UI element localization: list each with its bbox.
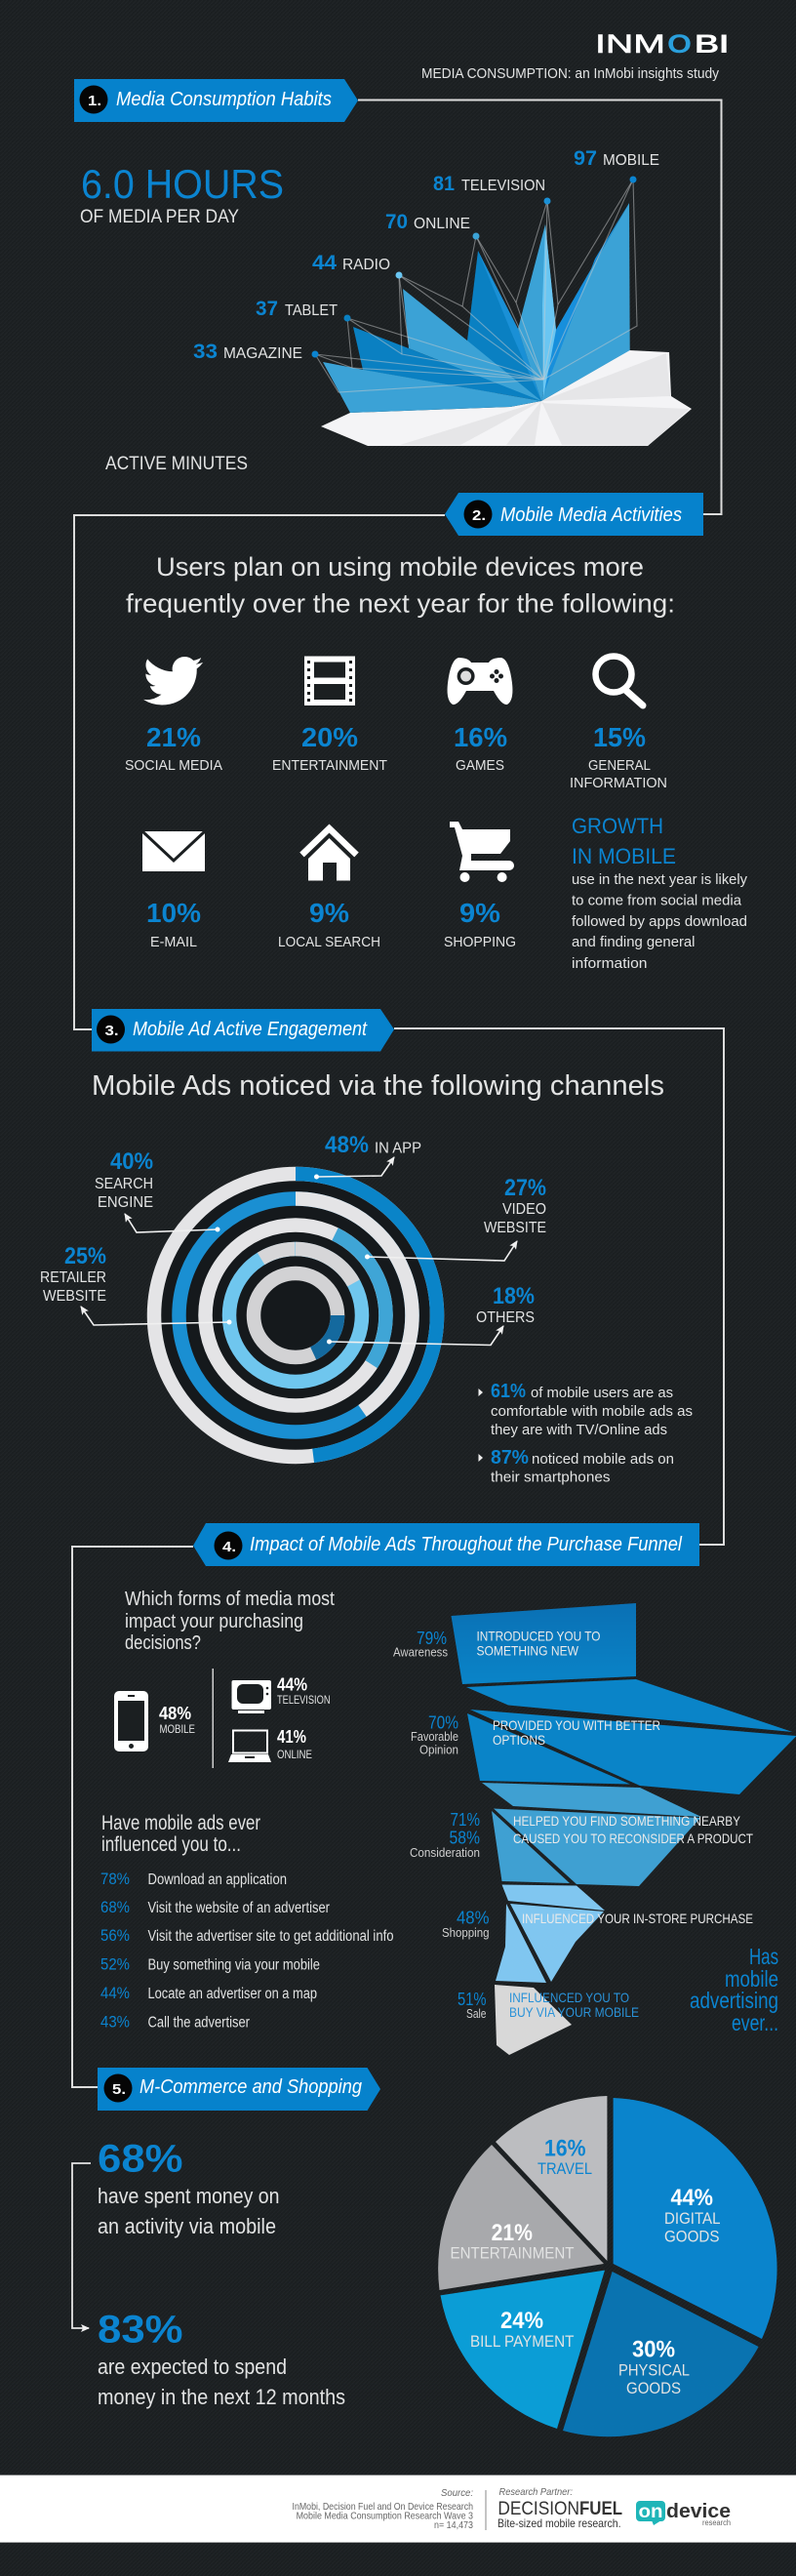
label: 79% awareness <box>393 1629 448 1659</box>
logo: InMobi: INM <box>595 29 665 59</box>
research partner: DecisionFuel: Research Partner: <box>499 2486 573 2498</box>
research partner: DecisionFuel: DECISION <box>498 2499 579 2519</box>
callout: retailer website: 25% <box>64 1243 106 1269</box>
heading: users plan: Users plan on using mobile devices more <box>156 552 644 582</box>
label: 81 television <box>433 173 545 195</box>
banner 2: Mobile Media Activities <box>445 493 703 536</box>
label: 70 online <box>385 211 470 233</box>
funnel: sale <box>495 1985 639 2055</box>
label: 44 radio: RADIO <box>342 257 390 273</box>
label: 71% 58% consideration: 71% <box>451 1810 480 1830</box>
label: 97 mobile: MOBILE <box>603 152 659 169</box>
stat: online 41%: ONLINE <box>277 1750 312 1761</box>
ring: in app <box>154 1174 437 1457</box>
stat: local search: 9% <box>309 898 349 928</box>
research partner: DecisionFuel <box>498 2486 622 2530</box>
bullet: 87% noticed: their smartphones <box>491 1469 611 1485</box>
callout: has mobile advertising ever: mobile <box>725 1966 778 1992</box>
slice: travel: TRAVEL <box>537 2159 592 2178</box>
slice: digital goods: GOODS <box>664 2228 720 2246</box>
stat: entertainment: ENTERTAINMENT <box>272 757 387 774</box>
stat: local search: LOCAL SEARCH <box>278 934 380 950</box>
connector lines between sections <box>72 100 724 2087</box>
pie chart: spending categories <box>438 2096 777 2436</box>
heading: have mobile ads ever <box>101 1812 260 1856</box>
slice: bill payment: BILL PAYMENT <box>470 2332 574 2351</box>
source text: Mobile Media Consumption Research Wave 3 <box>297 2510 473 2521</box>
stat: general information: GENERAL <box>588 757 651 774</box>
label: 33 magazine: 33 <box>193 341 218 363</box>
stat: shopping: 9% <box>459 898 500 928</box>
stat: games <box>454 722 507 774</box>
list: influence actions: 43% <box>100 2012 130 2032</box>
banner 5: M-Commerce and Shopping <box>98 2068 380 2111</box>
logo: InMobi <box>595 29 729 59</box>
fan: television <box>518 224 556 401</box>
study subtitle: MEDIA CONSUMPTION: an InMobi insights study <box>421 65 719 82</box>
stat: online 41%: 41% <box>277 1727 306 1747</box>
stat: 83% expected: 83% <box>98 2309 183 2352</box>
slice: physical goods: PHYSICAL <box>618 2361 690 2380</box>
slice: bill payment: 24% <box>500 2308 543 2334</box>
funnel: consideration: CAUSED YOU TO RECONSIDER A PRODUCT <box>513 1831 753 1846</box>
question: which forms of media: Which forms of media most <box>125 1589 335 1610</box>
stat: social media: SOCIAL MEDIA <box>125 757 222 774</box>
label: 70% favorable opinion <box>411 1713 458 1756</box>
caption: active minutes: ACTIVE MINUTES <box>105 453 248 474</box>
stat: general information: INFORMATION <box>570 775 667 791</box>
ring chart: ad channels <box>147 1167 444 1464</box>
slice: entertainment <box>438 2145 604 2290</box>
banner 3: Mobile Ad Active Engagement: Mobile Ad Active Engagement <box>133 1019 368 1040</box>
stat: general information: 15% <box>593 722 646 752</box>
label: 70% favorable opinion: 70% <box>428 1713 458 1733</box>
label: 70 online: 70 <box>385 211 408 233</box>
stat: e-mail <box>146 898 201 950</box>
callout: search engine: ENGINE <box>98 1194 153 1211</box>
fan: online <box>439 251 541 401</box>
stat: 6.0 hours: 6.0 HOURS <box>81 161 284 207</box>
callout: has mobile advertising ever: ever... <box>732 2010 778 2035</box>
icon: shopping cart <box>450 822 514 882</box>
bullet: 87% noticed: noticed mobile ads on <box>532 1451 674 1468</box>
callout: retailer website <box>40 1243 232 1325</box>
callout: growth in mobile: information <box>572 956 648 972</box>
slice: entertainment: ENTERTAINMENT <box>451 2244 574 2262</box>
stat: games: 16% <box>454 722 507 752</box>
bullet: 61% comfortable: they are with TV/Online ads <box>491 1422 667 1438</box>
list: influence actions <box>100 1870 394 2032</box>
question: which forms of media: impact your purchasing <box>125 1611 303 1632</box>
stat: television 44% <box>277 1674 330 1707</box>
icon: twitter bird <box>143 657 203 705</box>
label: 37 tablet: 37 <box>256 298 278 320</box>
stat: mobile 48% <box>159 1704 195 1736</box>
chart dots <box>312 176 636 357</box>
logo: on device research: research <box>702 2518 731 2527</box>
label: 97 mobile <box>574 147 659 170</box>
banner 5: M-Commerce and Shopping: M-Commerce and Shopping <box>139 2076 362 2098</box>
bullet: 61% comfortable <box>478 1381 693 1438</box>
stat: 6.0 hours <box>80 161 284 227</box>
footer band <box>0 2475 796 2543</box>
list: influence actions: Locate an advertiser on a map <box>148 1986 317 2002</box>
callout: search engine: 40% <box>110 1148 153 1175</box>
callout: growth in mobile <box>572 814 748 972</box>
banner 4: Impact of Mobile Ads: 4. <box>222 1539 236 1555</box>
stat: shopping: SHOPPING <box>444 934 516 950</box>
bullet: 87% noticed <box>478 1447 674 1485</box>
label: 70% favorable opinion: Favorable <box>411 1729 458 1744</box>
heading: mobile ads noticed: Mobile Ads noticed via the following channels <box>92 1070 664 1102</box>
stat: 68% spent: 68% <box>98 2138 183 2181</box>
stat: e-mail: E-MAIL <box>150 934 197 950</box>
funnel: favorable opinion: PROVIDED YOU WITH BETTER <box>493 1717 660 1733</box>
stat: 83% expected: money in the next 12 months <box>98 2385 345 2409</box>
banner 4: Impact of Mobile Ads: Impact of Mobile Ads Throughout the Purchase Funnel <box>250 1534 683 1555</box>
stat: mobile 48%: MOBILE <box>160 1724 195 1736</box>
label: 79% awareness: Awareness <box>393 1645 448 1659</box>
list: influence actions: 78% <box>100 1870 130 1888</box>
label: 37 tablet <box>256 298 338 320</box>
logo: on device research <box>636 2501 731 2527</box>
heading: have mobile ads ever: influenced you to... <box>101 1833 241 1856</box>
callout: others <box>327 1283 535 1345</box>
fan: mobile <box>541 203 630 401</box>
stat: entertainment: 20% <box>301 722 358 752</box>
funnel: awareness: INTRODUCED YOU TO <box>476 1628 601 1643</box>
bullet: 87% noticed: 87% <box>491 1447 529 1469</box>
callout: video website <box>365 1175 546 1261</box>
logo: InMobi: O <box>667 29 692 59</box>
callout: search engine: SEARCH <box>95 1176 153 1192</box>
icon: television <box>232 1680 271 1713</box>
funnel: awareness <box>451 1603 792 1732</box>
fan: tablet <box>353 327 541 401</box>
banner 3: Mobile Ad Active Engagement: 3. <box>105 1023 119 1039</box>
funnel: favorable opinion: OPTIONS <box>493 1732 545 1748</box>
callout: video website: 27% <box>504 1175 546 1201</box>
callout: growth in mobile: followed by apps download <box>572 914 747 930</box>
stat: 68% spent: an activity via mobile <box>98 2214 276 2238</box>
funnel: awareness: SOMETHING NEW <box>476 1643 579 1659</box>
stat: television 44%: TELEVISION <box>277 1695 330 1707</box>
stat: e-mail: 10% <box>146 898 201 928</box>
funnel chart <box>393 1603 796 2055</box>
fan: radio <box>403 289 541 401</box>
callout: search engine <box>95 1148 220 1232</box>
stat: social media: 21% <box>146 722 201 752</box>
ring: others <box>254 1273 338 1357</box>
funnel: consideration <box>482 1783 753 1886</box>
label: 71% 58% consideration: 58% <box>449 1829 480 1848</box>
stat: 6.0 hours: OF MEDIA PER DAY <box>80 206 239 227</box>
stat: 83% expected <box>98 2309 345 2409</box>
banner 5: M-Commerce and Shopping: 5. <box>112 2081 126 2098</box>
stat: local search <box>278 898 380 950</box>
label: 48% shopping: 48% <box>457 1909 490 1928</box>
stat: mobile 48%: 48% <box>159 1704 191 1723</box>
stat: entertainment <box>272 722 387 774</box>
label: 51% sale <box>458 1990 486 2021</box>
list: influence actions: 44% <box>100 1984 130 2002</box>
label: 48% shopping <box>442 1909 490 1940</box>
bullet: 61% comfortable: comfortable with mobile ads as <box>491 1403 693 1420</box>
label: 79% awareness: 79% <box>417 1629 447 1648</box>
source text <box>293 2487 473 2531</box>
banner 1: Media Consumption Habits: 1. <box>88 93 101 109</box>
icon: phone <box>114 1691 148 1751</box>
slice: entertainment: 21% <box>492 2220 533 2246</box>
label: 33 magazine <box>193 341 302 363</box>
wire outlines <box>315 180 637 392</box>
heading: users plan: frequently over the next year for the following: <box>126 589 675 619</box>
label: 81 television: TELEVISION <box>461 178 545 194</box>
ring: search engine <box>179 1198 412 1432</box>
stat: social media <box>125 722 222 774</box>
banner 1: Media Consumption Habits <box>74 79 358 122</box>
label: 51% sale: Sale <box>466 2006 486 2021</box>
list: influence actions: 52% <box>100 1955 130 1973</box>
icon: envelope <box>142 831 205 871</box>
label: 71% 58% consideration: Consideration <box>410 1845 480 1860</box>
slice: digital goods <box>614 2098 777 2339</box>
label: 97 mobile: 97 <box>574 147 597 170</box>
callout: growth in mobile: GROWTH <box>572 814 663 838</box>
bullet: 61% comfortable: of mobile users are as <box>531 1385 673 1401</box>
research partner: DecisionFuel: Bite-sized mobile research. <box>498 2516 620 2530</box>
slice: travel <box>496 2096 607 2261</box>
list: influence actions: Visit the advertiser site to get additional info <box>148 1928 394 1945</box>
callout: growth in mobile: to come from social media <box>572 894 742 909</box>
callout: video website: WEBSITE <box>484 1220 546 1236</box>
icon: house <box>302 828 357 880</box>
heading: users plan <box>126 552 675 619</box>
slice: digital goods: DIGITAL <box>664 2209 720 2228</box>
banner 2: Mobile Media Activities: 2. <box>472 507 486 524</box>
stat: television 44%: 44% <box>277 1674 307 1694</box>
question: which forms of media <box>125 1589 335 1654</box>
callout: others: OTHERS <box>476 1309 535 1326</box>
slice: bill payment <box>441 2271 605 2429</box>
callout: growth in mobile: IN MOBILE <box>572 844 676 868</box>
banner 3: Mobile Ad Active Engagement <box>92 1009 394 1052</box>
icon: film strip <box>304 656 355 705</box>
callout: growth in mobile: use in the next year is likely <box>572 872 748 888</box>
label: 48% shopping: Shopping <box>442 1925 490 1940</box>
label: 33 magazine: MAGAZINE <box>223 345 302 362</box>
callout: has mobile advertising ever: Has <box>749 1944 778 1969</box>
list: influence actions: 56% <box>100 1926 130 1945</box>
logo: InMobi: BI <box>695 29 729 59</box>
stat: games: GAMES <box>456 757 504 774</box>
stat: 68% spent <box>98 2138 279 2238</box>
funnel: shopping <box>496 1885 753 1983</box>
bracket arrow <box>72 2163 91 2328</box>
chart: active minutes by medium <box>193 147 692 446</box>
stat: general information <box>570 722 667 791</box>
slice: travel: 16% <box>544 2135 585 2162</box>
ring: video website <box>205 1226 386 1405</box>
callout: in app <box>314 1132 421 1179</box>
callout: others: 18% <box>493 1283 535 1309</box>
list: influence actions: Download an application <box>148 1872 287 1888</box>
funnel: sale: INFLUENCED YOU TO <box>509 1990 629 2005</box>
callout: retailer website: WEBSITE <box>43 1288 106 1305</box>
slice: physical goods: 30% <box>632 2336 675 2362</box>
icon: magnifying glass <box>595 656 643 705</box>
funnel: shopping: INFLUENCED YOUR IN-STORE PURCHASE <box>522 1911 753 1926</box>
label: 81 television: 81 <box>433 173 455 195</box>
stat: online 41% <box>277 1727 312 1761</box>
label: 70% favorable opinion: Opinion <box>419 1743 458 1756</box>
fan: magazine <box>323 362 541 413</box>
callout: video website: VIDEO <box>502 1201 546 1218</box>
list: influence actions: Buy something via your mobile <box>148 1957 320 1973</box>
label: 37 tablet: TABLET <box>285 302 338 319</box>
question: which forms of media: decisions? <box>125 1632 201 1654</box>
heading: have mobile ads ever: Have mobile ads ever <box>101 1812 260 1834</box>
stat: 83% expected: are expected to spend <box>98 2355 287 2379</box>
list: influence actions: Visit the website of an advertiser <box>148 1900 330 1916</box>
banner 2: Mobile Media Activities: Mobile Media Activities <box>500 504 682 526</box>
source text: InMobi, Decision Fuel and On Device Research <box>293 2501 473 2513</box>
source text: n= 14,473 <box>434 2519 473 2531</box>
list: influence actions: 68% <box>100 1898 130 1916</box>
funnel: consideration: HELPED YOU FIND SOMETHING NEARBY <box>513 1813 741 1829</box>
callout: in app: 48% <box>325 1132 369 1158</box>
icon: laptop <box>228 1731 271 1762</box>
callout: growth in mobile: and finding general <box>572 935 695 950</box>
chart base: white facets <box>321 350 692 446</box>
banner 1: Media Consumption Habits: Media Consumption Habits <box>116 89 332 110</box>
logo: on device research: device <box>666 2501 731 2522</box>
research partner: DecisionFuel: FUEL <box>579 2499 622 2519</box>
bullet: 61% comfortable: 61% <box>491 1381 526 1402</box>
icon: game controller <box>448 658 512 704</box>
list: influence actions: Call the advertiser <box>148 2014 250 2032</box>
callout: in app: IN APP <box>375 1140 421 1157</box>
source text: Source: <box>441 2487 473 2499</box>
callout: retailer website: RETAILER <box>40 1269 106 1286</box>
stat: 68% spent: have spent money on <box>98 2184 279 2208</box>
funnel: sale: BUY VIA YOUR MOBILE <box>509 2004 639 2020</box>
slice: physical goods <box>563 2272 759 2436</box>
ring: retailer website <box>229 1249 362 1382</box>
callout: has mobile advertising ever: advertising <box>690 1988 778 2013</box>
slice: digital goods: 44% <box>671 2185 713 2211</box>
label: 51% sale: 51% <box>458 1990 486 2009</box>
label: 44 radio <box>312 252 390 274</box>
stat: shopping <box>444 898 516 950</box>
slice: physical goods: GOODS <box>626 2379 681 2397</box>
banner 4: Impact of Mobile Ads <box>193 1523 699 1566</box>
label: 44 radio: 44 <box>312 252 337 274</box>
label: 71% 58% consideration <box>410 1810 480 1860</box>
callout: has mobile advertising ever <box>690 1944 778 2035</box>
label: 70 online: ONLINE <box>414 216 470 232</box>
funnel: favorable opinion <box>467 1710 796 1794</box>
logo: on device research: on <box>638 2502 663 2522</box>
